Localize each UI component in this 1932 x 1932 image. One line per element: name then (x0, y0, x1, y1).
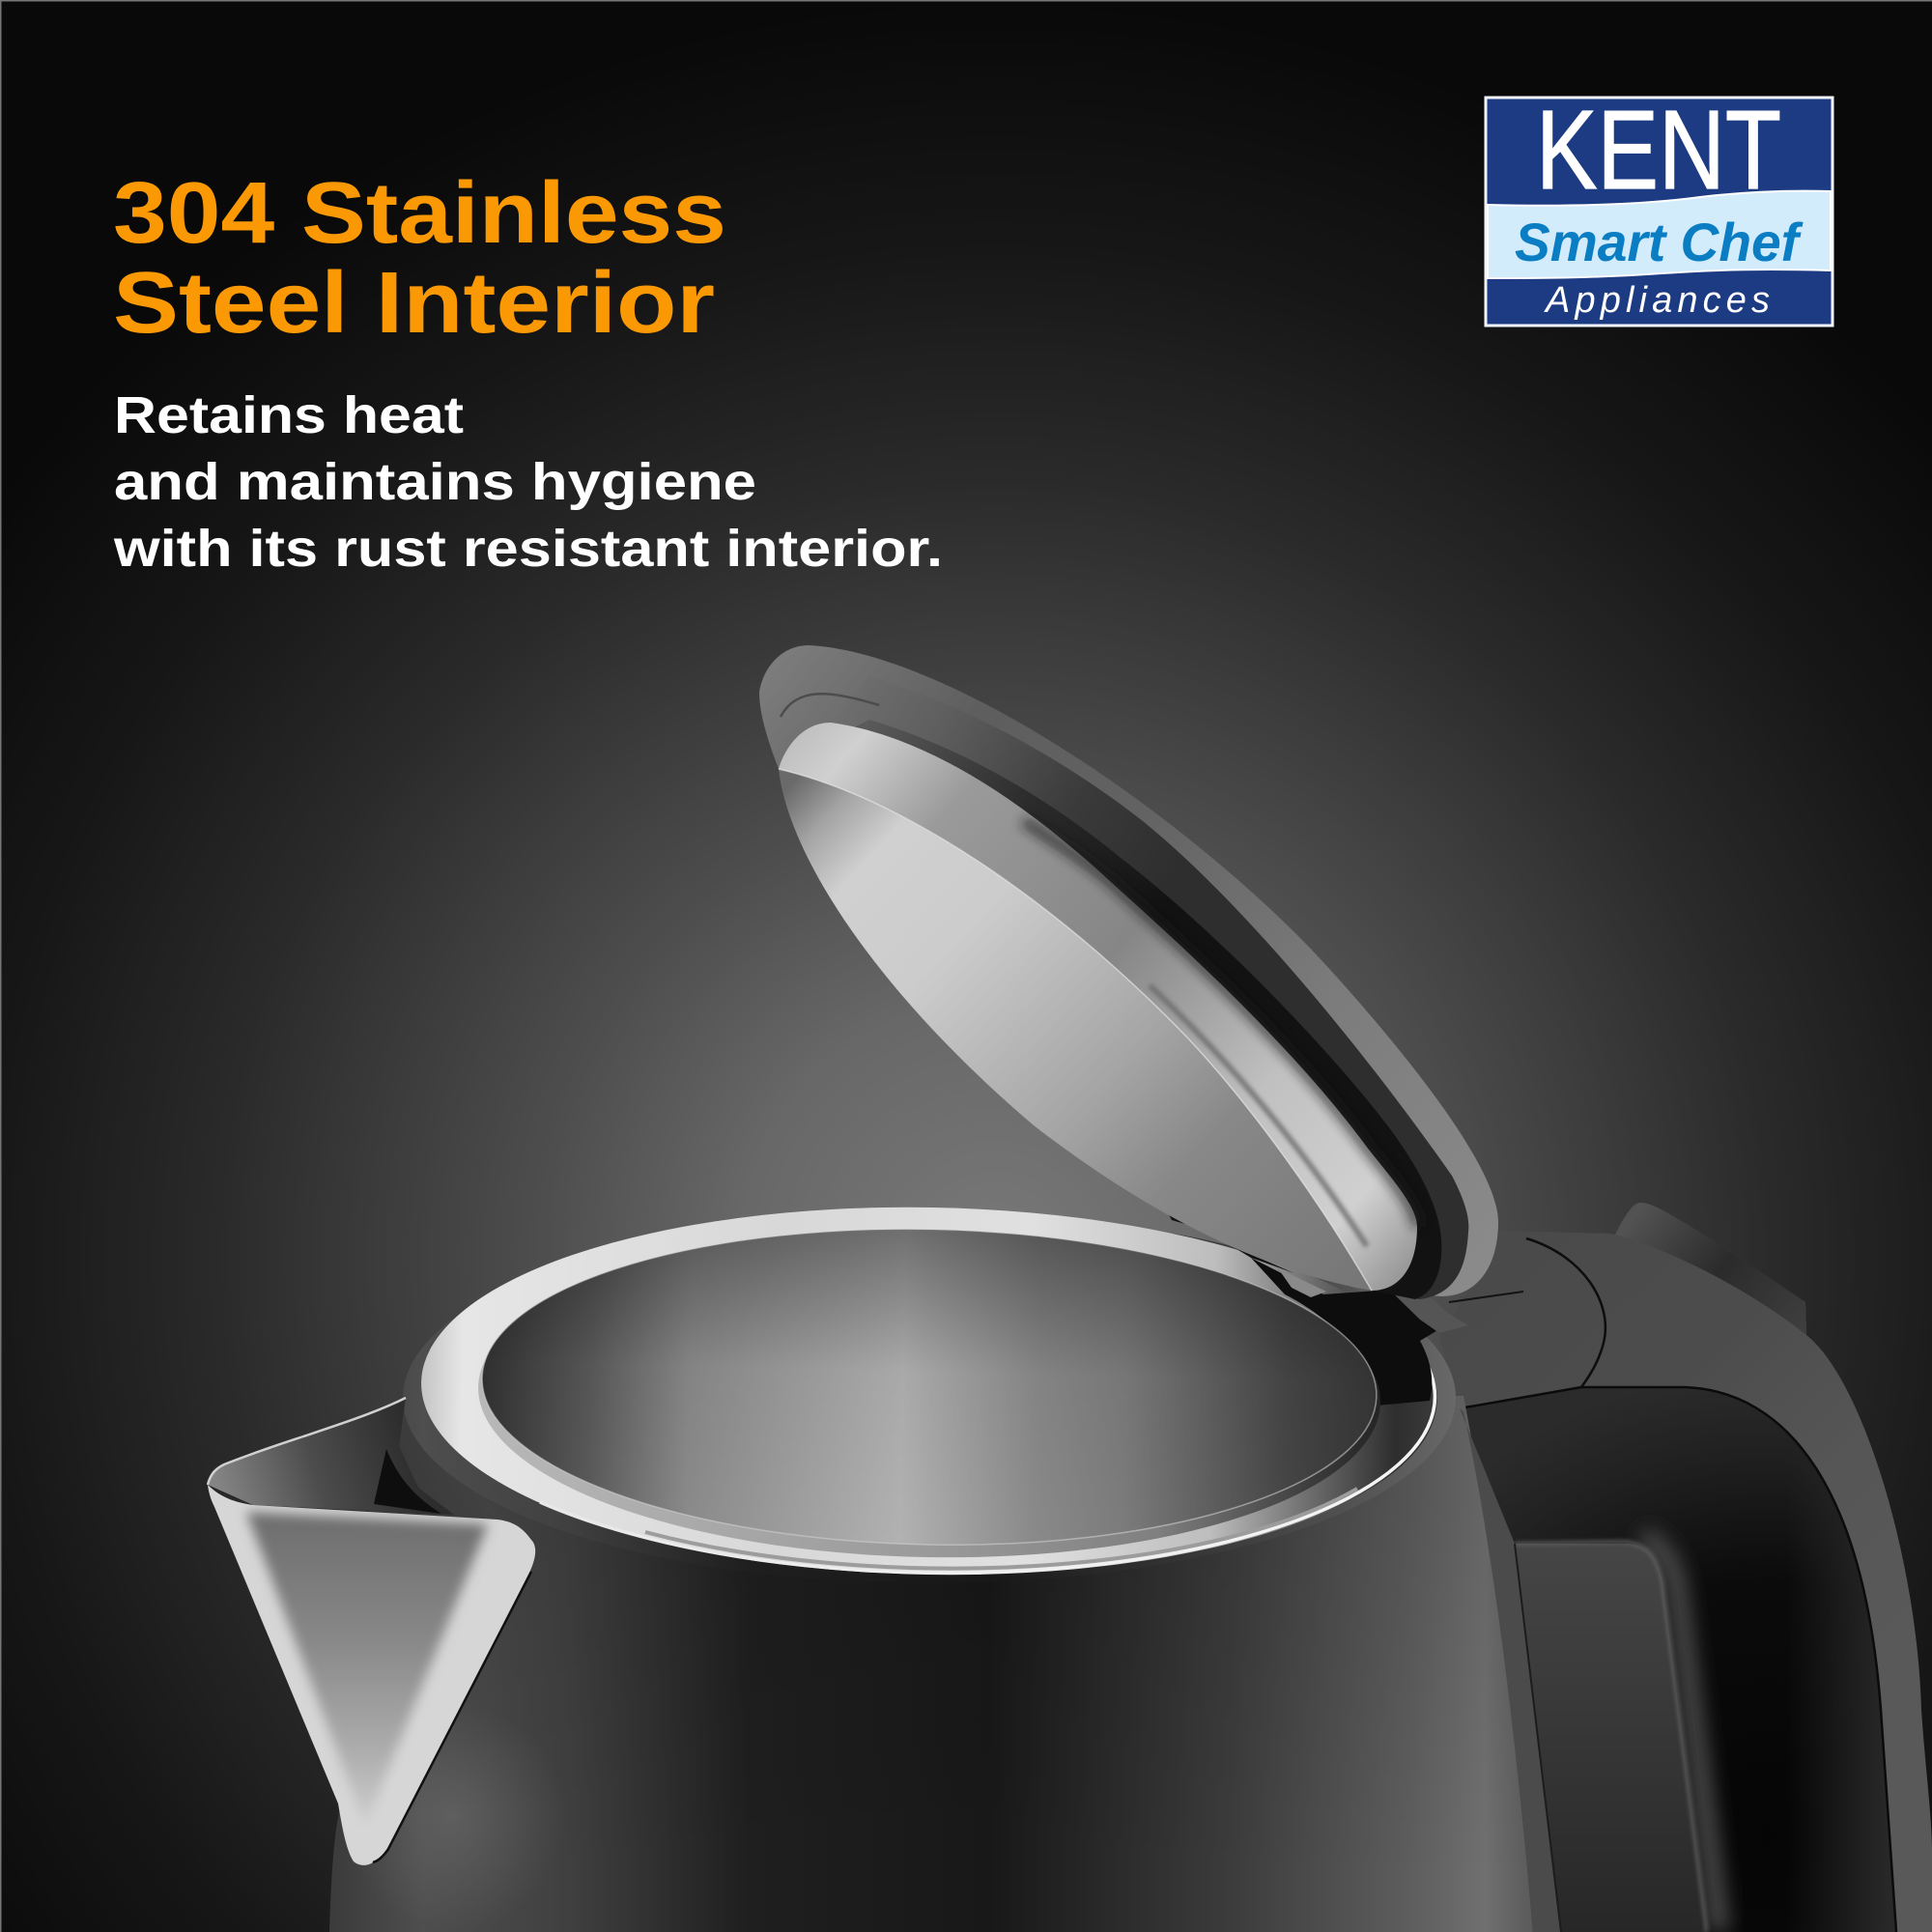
lid ring outer shadow (1024, 821, 1417, 1227)
logo: KENT Smart Chef Appliances (1486, 87, 1833, 326)
kettle handle window (1515, 1544, 1707, 1932)
power switch (1615, 1203, 1806, 1335)
handle inner highlight (1642, 1536, 1719, 1932)
neck seam (1526, 1238, 1605, 1387)
kettle handle (1439, 1203, 1932, 1932)
handle inner face (1460, 1387, 1896, 1932)
lid hinge bracket (1147, 1193, 1294, 1273)
heading: 304 Stainless (113, 165, 726, 262)
description text: with its rust resistant interior. (113, 520, 943, 578)
spout edge shadow (373, 1572, 531, 1862)
spout dark ribs (374, 1449, 441, 1514)
hinge recess (1251, 1258, 1449, 1406)
handle contour line (1460, 1387, 1896, 1932)
seam strip between body and handle (1460, 1408, 1561, 1932)
lid dark inner band (811, 676, 1468, 1299)
brushed steel interior (479, 1220, 1379, 1554)
hinge latch (1384, 1282, 1468, 1333)
heading: Steel Interior (113, 255, 715, 352)
lid black gasket (821, 720, 1441, 1299)
spout front plate (208, 1485, 535, 1865)
handle window edge highlight (1515, 1542, 1707, 1932)
stainless rim (418, 1199, 1440, 1583)
lid steel ring (779, 723, 1417, 1291)
description text: and maintains hygiene (114, 453, 756, 511)
rim inner bevel (475, 1225, 1383, 1565)
logo: KENT Smart Chef Appliances: Appliances (1544, 280, 1770, 321)
spout (198, 1398, 546, 1874)
logo: KENT Smart Chef Appliances: Smart Chef (1515, 212, 1804, 272)
lid hinge foot (1278, 1268, 1326, 1297)
spout brushed centre (246, 1512, 488, 1826)
lid step lines (781, 694, 879, 717)
lid outer shell (759, 645, 1498, 1296)
description text: Retains heat (114, 386, 464, 444)
lid steel plate (779, 769, 1372, 1291)
description text (113, 386, 943, 578)
rim outer highlight (540, 1352, 1435, 1573)
rim grey reflection line (645, 1489, 1357, 1569)
heading (113, 165, 726, 352)
lid ring inner groove (1150, 985, 1367, 1246)
rim collar (403, 1212, 1456, 1583)
kettle body (329, 1396, 1561, 1932)
open lid (759, 645, 1498, 1299)
spout inner back (208, 1398, 454, 1515)
logo: KENT Smart Chef Appliances: KENT (1536, 87, 1781, 213)
